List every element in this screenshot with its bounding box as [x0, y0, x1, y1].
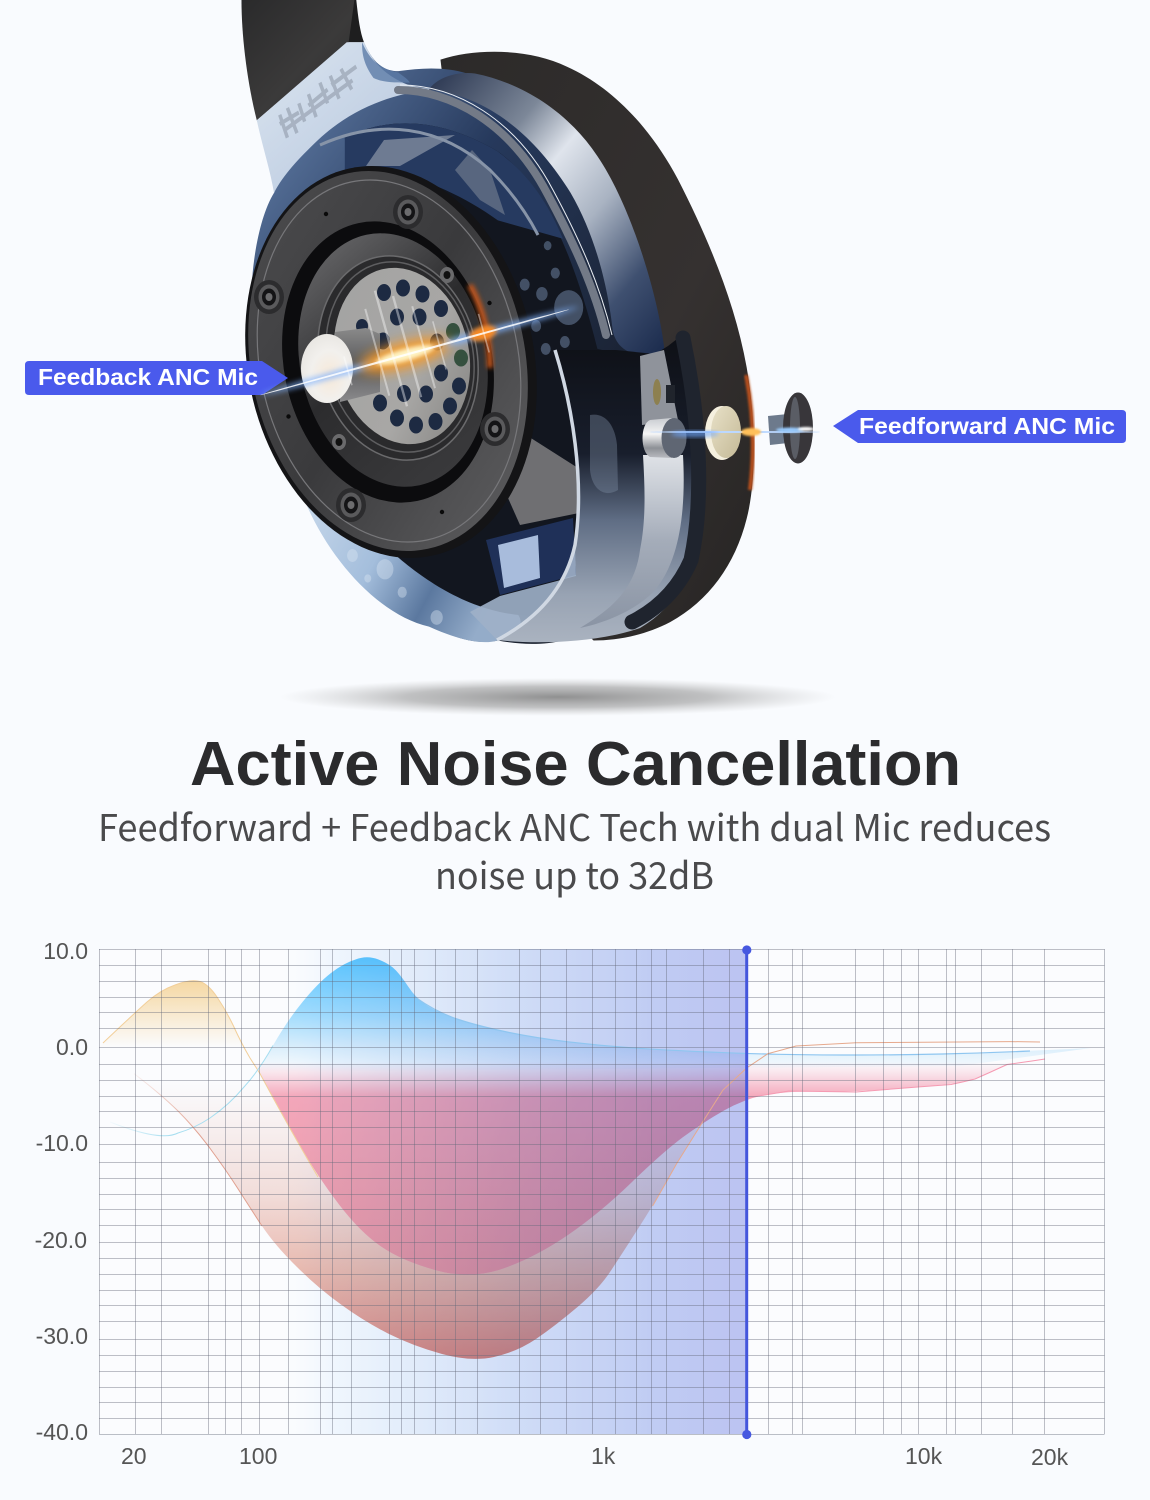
inner lens line: [320, 129, 538, 235]
orange pad edge crescent: [746, 375, 753, 490]
grey rib spoke: [455, 150, 505, 215]
callout: Feedforward ANC Mic: [833, 410, 1126, 443]
bottom translucent area: [470, 548, 576, 640]
grey wedge spoke: [366, 135, 455, 166]
grid lines: [99, 949, 1104, 1434]
dot perforations: [520, 241, 606, 376]
blue curve right line: [415, 997, 1030, 1055]
noise reduction chart: [35, 938, 1104, 1470]
orange core: [741, 428, 761, 436]
light flare on feedforward mic: [650, 375, 820, 490]
yoke neck blue tint: [362, 42, 410, 83]
lower right translucent housing: [470, 335, 703, 642]
dark outer band: [632, 338, 699, 622]
feedback mic white disc: [301, 334, 353, 403]
printed traces on yoke: [280, 67, 356, 138]
ring rim: [210, 139, 572, 585]
marker bottom dot: [742, 1430, 751, 1439]
orange secondary glow: [468, 323, 498, 344]
subtitle line 1: Feedforward + Feedback ANC Tech with dual Mic reduces: [98, 798, 1051, 852]
light flare on feedback mic: [242, 239, 592, 443]
lower transparent lobe: [305, 500, 521, 642]
marker top dot: [742, 945, 751, 955]
blue glow on mic: [776, 428, 804, 432]
grey inner panel: [500, 433, 579, 525]
transparent shell body: [251, 42, 697, 644]
blue beam: [650, 431, 820, 433]
headphone exploded ear cup illustration: [210, 0, 813, 644]
capsule end cap: [662, 418, 686, 458]
disc edge: [705, 406, 739, 460]
circuit board light chip: [498, 535, 540, 588]
ring bevel line: [225, 155, 553, 567]
yellow core: [374, 341, 436, 369]
silver side capsule: [642, 418, 686, 458]
blue curve left line: [110, 1046, 273, 1136]
title: Active Noise Cancellation: [190, 730, 961, 799]
subtitle line 2: noise up to 32dB: [435, 846, 714, 900]
shell and ear pad traced layers: [241, 0, 754, 644]
mic connector: [768, 414, 788, 445]
vertical sparkle spikes: [328, 265, 498, 419]
silver upper plate: [640, 350, 678, 425]
ring inner groove: [257, 201, 519, 523]
lobe bubble texture: [347, 549, 443, 625]
orange core glow: [357, 330, 453, 380]
shell ring edge: [398, 90, 606, 335]
subtitle: [98, 798, 1051, 900]
callout arrow tag: [25, 361, 288, 395]
label 0.0: 0.0: [56, 1034, 88, 1060]
blue glow left: [671, 431, 719, 437]
label -20.0: -20.0: [35, 1227, 87, 1253]
callout: Feedback ANC Mic: [25, 361, 288, 395]
driver step: [299, 241, 497, 475]
callout text: Feedback ANC Mic: [38, 364, 258, 390]
grill holes: [356, 280, 468, 434]
blue cutoff marker line: [742, 945, 751, 1439]
ear pad: [440, 52, 754, 640]
capsule body: [642, 418, 672, 458]
yellow feedforward hump: [99, 981, 246, 1048]
headband black arm: [241, 0, 354, 120]
label 20k: 20k: [1031, 1444, 1069, 1470]
label 100: 100: [239, 1443, 277, 1469]
shell ring highlight: [400, 85, 612, 335]
disc face: [711, 406, 741, 458]
ring screws: [254, 195, 510, 522]
driver metal grill: [318, 255, 486, 457]
battery port outline: [590, 415, 618, 493]
driver step ring line: [309, 248, 491, 466]
x axis labels: [121, 1443, 1069, 1470]
label 1k: 1k: [591, 1443, 616, 1469]
chart background: [99, 949, 1104, 1434]
mic cap: [783, 392, 813, 464]
dark inner cavity: [345, 123, 685, 616]
orange reflection crescent: [470, 285, 490, 368]
upper shell window spokes: [320, 85, 612, 335]
housing translucent fill: [497, 335, 703, 642]
plate slot: [653, 379, 661, 405]
mic highlight: [790, 397, 800, 459]
pink tail line: [747, 1059, 1045, 1098]
marker stem: [745, 950, 748, 1434]
upper translucent swoosh: [429, 73, 664, 355]
feedforward mic part: [768, 392, 813, 464]
circuit board frame: [486, 518, 576, 595]
label 10k: 10k: [905, 1443, 943, 1469]
peach deep reduction band: [134, 1074, 703, 1359]
plate switch: [666, 385, 675, 403]
white beam: [260, 309, 569, 396]
pink noise reduction region: [241, 1043, 1091, 1275]
blue response hump: [260, 957, 1091, 1072]
ground shadow under headphone: [280, 678, 836, 716]
callout text: Feedforward ANC Mic: [859, 413, 1115, 439]
driver mounting ring: [210, 139, 572, 585]
orange rising curve line: [653, 1042, 1040, 1206]
headband neck dark wedge: [347, 0, 364, 42]
upper cavity navy ribs: [345, 123, 563, 239]
label -40.0: -40.0: [36, 1419, 88, 1445]
thin housing edge: [497, 350, 578, 640]
y axis labels: [35, 938, 88, 1445]
ring pin dots: [286, 212, 492, 514]
callout arrow tag: [833, 410, 1126, 443]
transparent headband yoke: [257, 42, 433, 193]
label 10.0: 10.0: [43, 938, 88, 964]
ring inner wall: [275, 215, 511, 505]
label -10.0: -10.0: [36, 1130, 88, 1156]
yellow curve line: [103, 981, 318, 1177]
feedback mic stem: [335, 328, 380, 402]
blue beam glow: [260, 304, 579, 398]
gold microphone disc: [705, 406, 741, 460]
lower curve line: [134, 1074, 262, 1226]
ANC active band panel: [260, 949, 747, 1434]
white spike on mic: [798, 427, 814, 431]
ring face: [214, 145, 562, 577]
label 20: 20: [121, 1443, 147, 1469]
label -30.0: -30.0: [36, 1323, 88, 1349]
silver lower strip: [580, 455, 684, 628]
